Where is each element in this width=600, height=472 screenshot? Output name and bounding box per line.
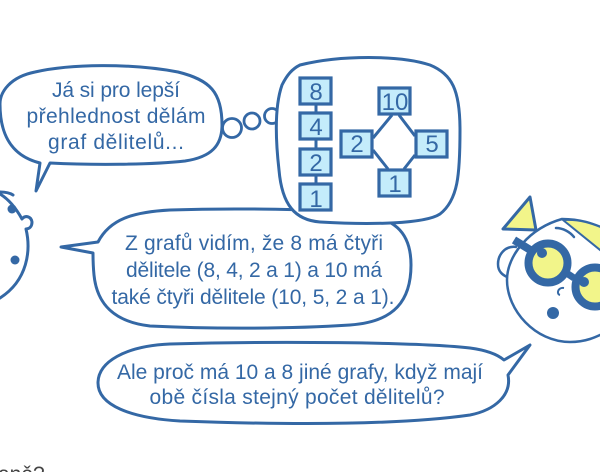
graph of divisors of 8	[300, 78, 331, 213]
graph of divisors of 8: 2	[309, 150, 323, 177]
left character head	[0, 192, 32, 298]
graph of divisors of 8: 8	[309, 79, 323, 106]
graph of divisors of 10: 2	[350, 131, 364, 158]
speech bubble: Z grafů vidím: dělitele (8, 4, 2 a 1) a 10 má	[126, 259, 382, 282]
speech bubble: question	[98, 342, 530, 423]
graph of divisors of 10	[341, 88, 447, 198]
thought bubble circles	[222, 108, 280, 138]
thought bubble with divisor graphs	[276, 58, 460, 223]
hat triangle	[503, 197, 536, 230]
speech bubble: graph of divisors: Já si pro lepší	[52, 79, 180, 102]
speech bubble: question: obě čísla stejný počet dělitelů?	[150, 386, 444, 409]
right character head	[498, 197, 600, 342]
speech bubble: graph of divisors: graf dělitelů...	[48, 131, 184, 154]
face	[507, 219, 600, 342]
ear	[498, 247, 517, 277]
speech bubble: question: Ale proč má 10 a 8 jiné grafy, když mají	[117, 361, 483, 384]
graph of divisors of 10: 10	[382, 89, 408, 116]
speech bubble: Z grafů vidím: Z grafů vidím, že 8 má čtyři	[125, 232, 383, 255]
graph of divisors of 8: 1	[309, 186, 323, 213]
graph of divisors of 10: 1	[388, 171, 402, 198]
speech bubble: Z grafů vidím: také čtyři dělitele (10, 5, 2 a 1).	[112, 286, 394, 309]
glasses	[514, 240, 532, 251]
hair	[563, 220, 600, 258]
graph of divisors of 10: 5	[425, 131, 439, 158]
speech bubble: graph of divisors	[0, 66, 222, 191]
speech bubble: graph of divisors: přehlednost dělám	[26, 105, 206, 128]
graph of divisors of 8: 4	[309, 114, 323, 141]
speech bubble: Z grafů vidím	[61, 209, 411, 328]
